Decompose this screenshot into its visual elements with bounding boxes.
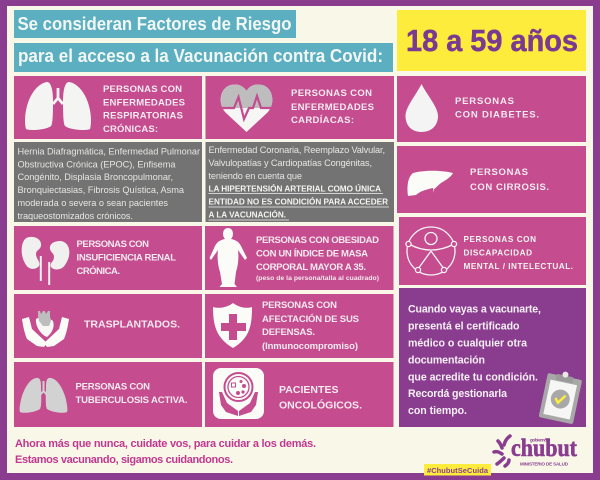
panel: detalle cardiacas: A LA VACUNACIÓN.: [208, 208, 286, 220]
icon: accessibility circle: [406, 227, 457, 275]
panel: cardiacas: PERSONAS CON: [291, 88, 372, 99]
panel: tuberculosis: [14, 362, 202, 427]
panel: documentacion: que acredite tu condición.: [408, 372, 538, 384]
panel: diabetes: PERSONAS: [455, 96, 514, 107]
panel: discapacidad: MENTAL / INTELECTUAL.: [464, 262, 573, 271]
panel: renal: PERSONAS CON: [76, 239, 149, 250]
panel: renal: INSUFICIENCIA RENAL: [76, 252, 176, 264]
closing message: Ahora más que nunca, cuidate vos, para cuidar a los demás.: [15, 438, 316, 450]
panel: detalle cardiacas: Enfermedad Coronaria, Reemplazo Valvular,: [208, 145, 385, 155]
panel: detalle respiratorias: Congénito, Displasia Broncopulmonar,: [18, 172, 173, 182]
panel: documentacion: [399, 288, 586, 427]
logo: Chubut: gobierno: [530, 438, 547, 442]
icon: kidneys: [22, 237, 69, 285]
panel: respiratorias: RESPIRATORIAS: [103, 110, 183, 122]
panel: diabetes: [397, 76, 586, 142]
icon: grey lungs: [20, 378, 67, 413]
panel: cirrosis: PERSONAS: [470, 167, 528, 178]
panel: trasplantados: [14, 294, 202, 358]
title: para el acceso a la Vacunación contra Covid:: [18, 45, 383, 66]
hashtag badge: #ChubutSeCuida: [427, 466, 489, 475]
panel: documentacion: médico o cualquier otra: [408, 338, 527, 350]
panel: cardiacas: CARDÍACAS:: [291, 115, 354, 126]
icon: lungs: [25, 82, 91, 130]
panel: detalle cardiacas: LA HIPERTENSIÓN ARTERIAL COMO ÚNICA: [208, 182, 381, 194]
panel: obesidad: CON UN ÍNDICE DE MASA: [256, 248, 368, 260]
panel: tuberculosis: PERSONAS CON: [76, 382, 150, 392]
panel: respiratorias: CRÓNICAS:: [103, 123, 158, 135]
icon: heart with pulse: [221, 84, 273, 132]
icon: cell in hands: [213, 368, 264, 419]
panel: detalle respiratorias: traqueostomizados crónicos.: [18, 211, 133, 221]
logo: Chubut: MINISTERIO DE SALUD: [520, 462, 569, 466]
panel: respiratorias: ENFERMEDADES: [103, 98, 185, 108]
panel: respiratorias: [14, 76, 202, 139]
panel: cardiacas: [206, 76, 394, 139]
title: [14, 10, 393, 72]
panel: discapacidad: [399, 217, 586, 285]
panel: documentacion: con tiempo.: [408, 405, 467, 417]
panel: cirrosis: [397, 146, 586, 213]
panel: defensas: AFECTACIÓN DE SUS: [262, 313, 359, 325]
panel: detalle respiratorias: [14, 142, 202, 222]
panel: detalle cardiacas: [206, 142, 394, 222]
panel: discapacidad: PERSONAS CON: [464, 235, 536, 244]
panel: detalle cardiacas: ENTIDAD NO ES CONDICIÓN PARA ACCEDER: [208, 196, 388, 206]
panel: documentacion: documentación: [408, 354, 485, 366]
panel: defensas: [205, 294, 394, 358]
panel: discapacidad: DISCAPACIDAD: [464, 248, 532, 258]
panel: oncologicos: ONCOLÓGICOS.: [279, 398, 362, 412]
panel: detalle respiratorias: moderada o severa o sean pacientes: [18, 198, 168, 208]
icon: body silhouette: [210, 228, 247, 287]
panel: oncologicos: [205, 362, 394, 427]
panel: renal: [14, 226, 202, 290]
title: Se consideran Factores de Riesgo: [18, 14, 292, 34]
panel: renal: CRÓNICA.: [76, 265, 120, 277]
logo: Chubut: chubut: [511, 435, 578, 462]
panel: obesidad: (peso de la persona/talla al cuadrado): [256, 275, 379, 282]
panel: detalle respiratorias: Bronquiectasias, Fibrosis Quística, Asma: [18, 185, 185, 195]
panel: respiratorias: PERSONAS CON: [103, 84, 182, 95]
logo: Chubut: [494, 435, 578, 466]
panel: defensas: PERSONAS CON: [262, 300, 337, 311]
panel: cardiacas: ENFERMEDADES: [291, 102, 374, 113]
panel: trasplantados: TRASPLANTADOS.: [84, 318, 180, 330]
panel: obesidad: CORPORAL MAYOR A 35.: [256, 262, 366, 273]
panel: cirrosis: CON CIRROSIS.: [470, 182, 549, 193]
panel: documentacion: presentá el certificado: [408, 320, 520, 332]
closing message: [15, 438, 316, 466]
icon: shield with cross: [213, 303, 252, 348]
panel: documentacion: Recordá gestionarla: [408, 388, 507, 400]
icon: drop: [406, 84, 438, 132]
panel: detalle respiratorias: Obstructiva Crónica (EPOC), Enfisema: [18, 160, 176, 170]
panel: obesidad: [205, 226, 394, 290]
panel: detalle cardiacas: teniendo en cuenta que: [208, 171, 302, 181]
panel: obesidad: PERSONAS CON OBESIDAD: [256, 235, 379, 246]
closing message: Estamos vacunando, sigamos cuidandonos.: [15, 454, 233, 466]
age badge: 18 a 59 años: [406, 23, 578, 58]
panel: defensas: DEFENSAS.: [262, 327, 315, 338]
panel: documentacion: Cuando vayas a vacunarte,: [408, 304, 541, 316]
panel: detalle cardiacas: Valvulopatías y Cardiopatías Congénitas,: [208, 158, 372, 168]
panel: detalle respiratorias: Hernia Diafragmática, Enfermedad Pulmonar: [18, 146, 200, 156]
icon: liver: [408, 171, 453, 196]
panel: oncologicos: PACIENTES: [279, 384, 338, 396]
panel: tuberculosis: TUBERCULOSIS ACTIVA.: [76, 395, 188, 406]
icon: clipboard: [539, 368, 583, 424]
age badge: [397, 10, 586, 71]
panel: diabetes: CON DIABETES.: [455, 110, 539, 120]
icon: hands holding heart: [22, 311, 69, 347]
panel: defensas: (Inmunocompromiso): [262, 341, 358, 352]
